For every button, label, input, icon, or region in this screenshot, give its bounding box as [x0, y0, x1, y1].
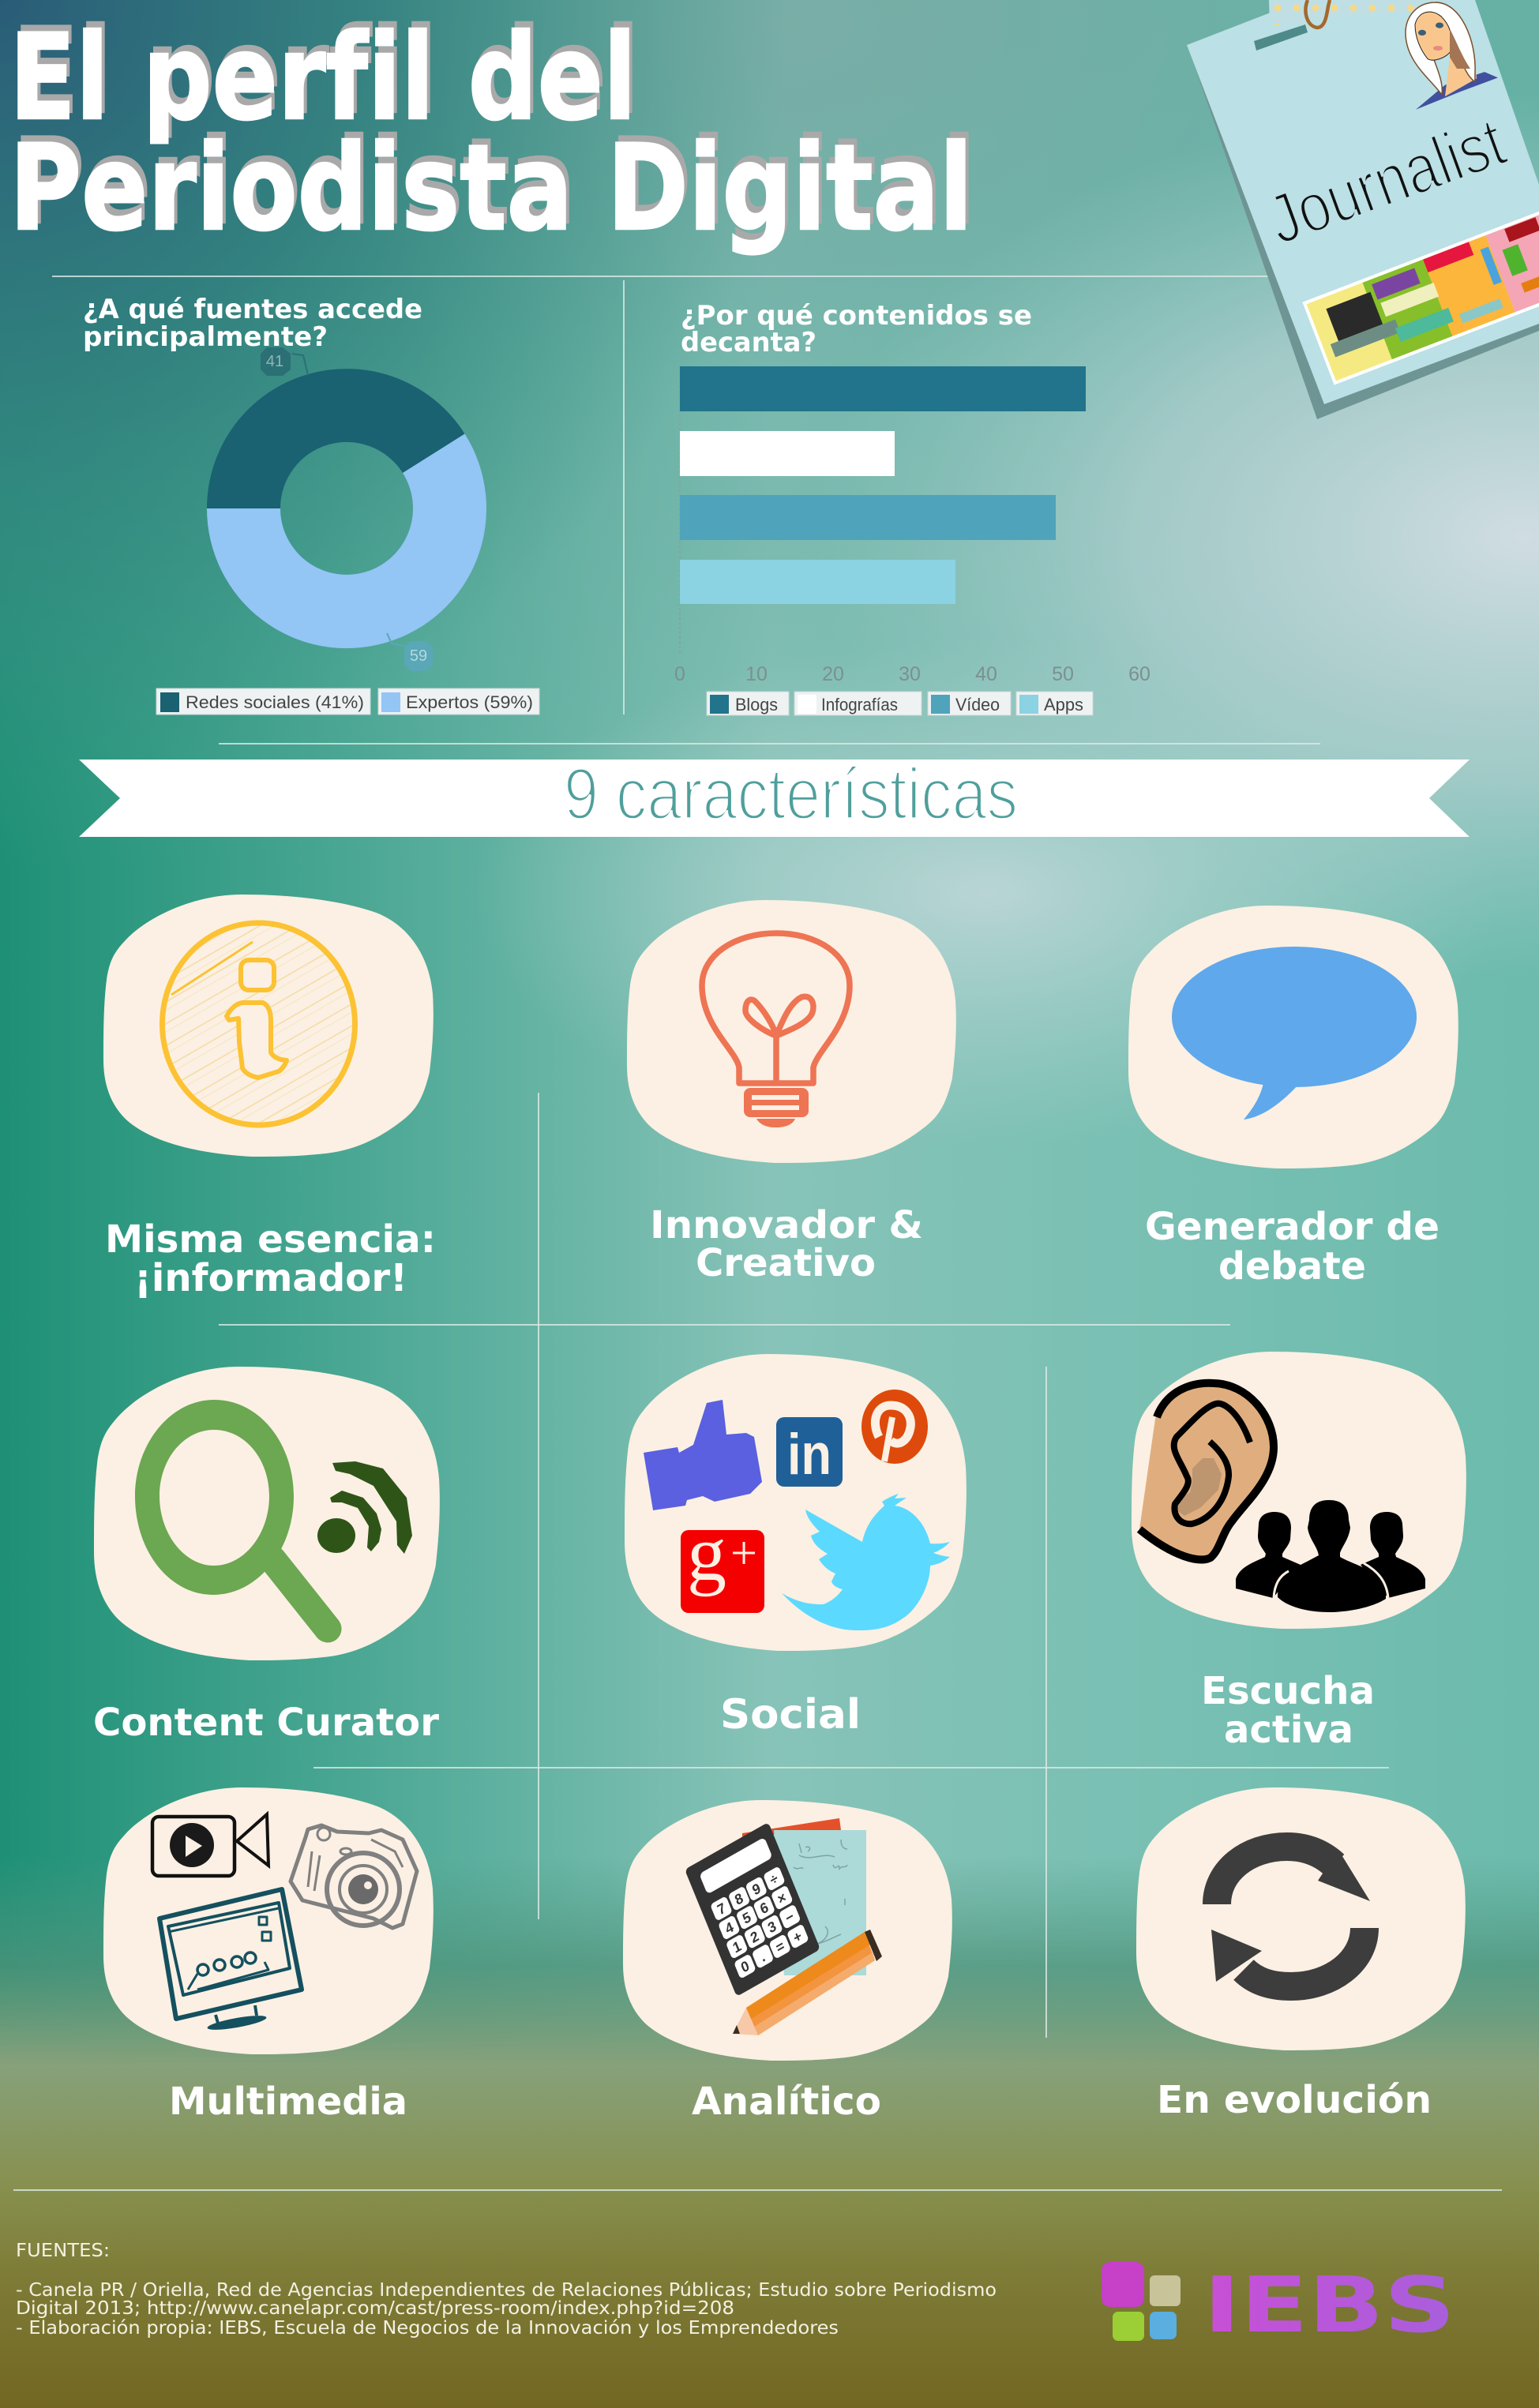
- icon: calculator: 9: [750, 1880, 763, 1899]
- label: [1145, 1205, 1440, 1288]
- heading: contenidos: decanta?: [681, 327, 816, 358]
- panel: Multimedia: [103, 1787, 434, 2124]
- icon: calculator: =: [774, 1937, 786, 1956]
- label: activa: [1224, 1708, 1353, 1752]
- panel: Content Curator: [93, 1367, 440, 1745]
- icon: pencil: [733, 1930, 882, 2035]
- icon: colour block: [1304, 205, 1539, 383]
- title: [9, 3, 976, 257]
- icon: notes paper: [774, 1830, 866, 1975]
- icon: LinkedIn: in: [787, 1423, 831, 1487]
- icon: photo camera: [291, 1825, 417, 1928]
- bar chart: [680, 366, 1086, 655]
- icon: Pinterest: [861, 1390, 928, 1464]
- legend: contenidos: Apps: [1044, 695, 1083, 715]
- icon: audience: [1236, 1500, 1425, 1612]
- label: debate: [1218, 1244, 1366, 1288]
- label: Multimedia: [169, 2080, 407, 2124]
- footer: sources: FUENTES:: [16, 2241, 110, 2261]
- icon: info: [163, 923, 355, 1125]
- label: Analítico: [692, 2080, 881, 2124]
- legend: contenidos: Vídeo: [955, 695, 1000, 715]
- icon: Google plus: g: [687, 1510, 726, 1597]
- icon: calculator: 5: [741, 1909, 753, 1927]
- label: Creativo: [696, 1241, 876, 1285]
- axis labels: 10: [745, 663, 768, 685]
- footer: sources: - Canela PR / Oriella, Red de Agencias Independientes de Relaciones Públicas; Estudio sobre Periodismo: [16, 2280, 997, 2301]
- label: Innovador &: [650, 1203, 923, 1247]
- icon: calculator: 3: [766, 1918, 779, 1937]
- axis labels: 30: [899, 663, 921, 685]
- legend: contenidos: Infografías: [821, 695, 898, 715]
- title: El perfil del: [9, 9, 636, 147]
- legend: fuentes: [156, 688, 539, 715]
- axis labels: 50: [1052, 663, 1074, 685]
- axis labels: 40: [975, 663, 997, 685]
- panel: Analítico: [623, 1800, 952, 2124]
- icon: monitor: [160, 1889, 302, 2033]
- label: En evolución: [1157, 2078, 1432, 2122]
- data label: 59: [387, 633, 433, 671]
- icon: calculator: −: [783, 1908, 796, 1926]
- panel: Misma esencia: [103, 895, 436, 1300]
- label: [650, 1203, 923, 1285]
- icon: red paper: [742, 1818, 841, 1837]
- icon: speech bubble: [1172, 947, 1417, 1120]
- icon: magnifier and RSS: [135, 1400, 412, 1629]
- title: Periodista Digital: [9, 120, 973, 257]
- heading: fuentes: [83, 294, 422, 353]
- icon: tape and clip: [1254, 0, 1421, 51]
- icon: Twitter bird: [782, 1494, 950, 1630]
- icon: calculator: 8: [733, 1890, 745, 1908]
- title: Periodista Digital: [13, 114, 976, 251]
- label: [1201, 1669, 1375, 1752]
- panel: Innovador y Creativo: [627, 900, 956, 1285]
- banner: 9 características: 9 características: [564, 754, 1018, 835]
- data label: 41: 41: [266, 353, 283, 370]
- label: Content Curator: [93, 1701, 439, 1745]
- heading: fuentes: principalmente?: [83, 321, 328, 353]
- donut chart: [207, 369, 486, 648]
- icon: calculator: .: [758, 1949, 768, 1965]
- legend: contenidos: [707, 692, 1093, 715]
- legend: fuentes: Expertos (59%): [406, 692, 533, 712]
- heading: fuentes: ¿A qué fuentes accede: [83, 294, 422, 325]
- panel: En evolución: [1136, 1787, 1466, 2122]
- panel: contenidos bar chart: [674, 300, 1150, 715]
- icon: woman portrait: [1406, 2, 1498, 110]
- icon: calculator: 4: [723, 1919, 736, 1937]
- icon: calculator: 2: [748, 1928, 761, 1946]
- icon: calculator: ×: [775, 1889, 788, 1907]
- panel: Generador de debate: [1128, 906, 1458, 1288]
- icon: thumbs up: [644, 1400, 762, 1510]
- icon: calculator: +: [791, 1928, 804, 1946]
- panel: fuentes donut chart: [83, 294, 539, 715]
- label: Generador de: [1145, 1205, 1440, 1249]
- icon: calculator: 1: [730, 1937, 744, 1956]
- legend: fuentes: Redes sociales (41%): [186, 692, 364, 712]
- axis labels: 0: [674, 663, 685, 685]
- icon: calculator: [685, 1822, 820, 1997]
- legend: contenidos: Blogs: [735, 695, 778, 715]
- heading: contenidos: [681, 300, 1032, 358]
- icon: video camera: [152, 1814, 268, 1876]
- footer: sources: [16, 2241, 997, 2339]
- footer: sources: - Elaboración propia: IEBS, Escuela de Negocios de la Innovación y los Emprendedores: [16, 2318, 839, 2339]
- icon: ear: [1139, 1383, 1274, 1559]
- panel: Escucha activa: [1132, 1352, 1466, 1752]
- icon: calculator: ÷: [768, 1870, 780, 1889]
- panel: journalist badge: [1187, 0, 1539, 419]
- label: Misma esencia:: [105, 1217, 436, 1262]
- logo: IEBS: [1102, 2260, 1455, 2350]
- icon: sync arrows: [1211, 1847, 1370, 1986]
- icon: light bulb: [702, 933, 850, 1127]
- data label: 59: 59: [410, 647, 427, 665]
- title: El perfil del: [13, 3, 640, 141]
- label: Social: [720, 1691, 861, 1738]
- logo: IEBS: IEBS: [1203, 2260, 1455, 2350]
- icon: calculator: 7: [715, 1900, 728, 1919]
- label: Escucha: [1201, 1669, 1375, 1713]
- data label: 41: [261, 347, 308, 376]
- axis labels: 60: [1128, 663, 1150, 685]
- icon: Google plus: [681, 1510, 764, 1613]
- heading: contenidos: ¿Por qué contenidos se: [681, 300, 1032, 332]
- axis labels: [674, 663, 1150, 685]
- panel: Social: [625, 1354, 967, 1738]
- footer: sources: Digital 2013; http://www.canelapr.com/cast/press-room/index.php?id=208: [16, 2298, 734, 2319]
- icon: calculator: 0: [738, 1957, 752, 1976]
- banner: 9 características: [79, 754, 1470, 837]
- label: ¡informador!: [134, 1256, 407, 1300]
- label: [105, 1217, 436, 1300]
- icon: Google plus: +: [730, 1527, 757, 1579]
- axis labels: 20: [822, 663, 844, 685]
- icon: calculator: 6: [758, 1899, 771, 1918]
